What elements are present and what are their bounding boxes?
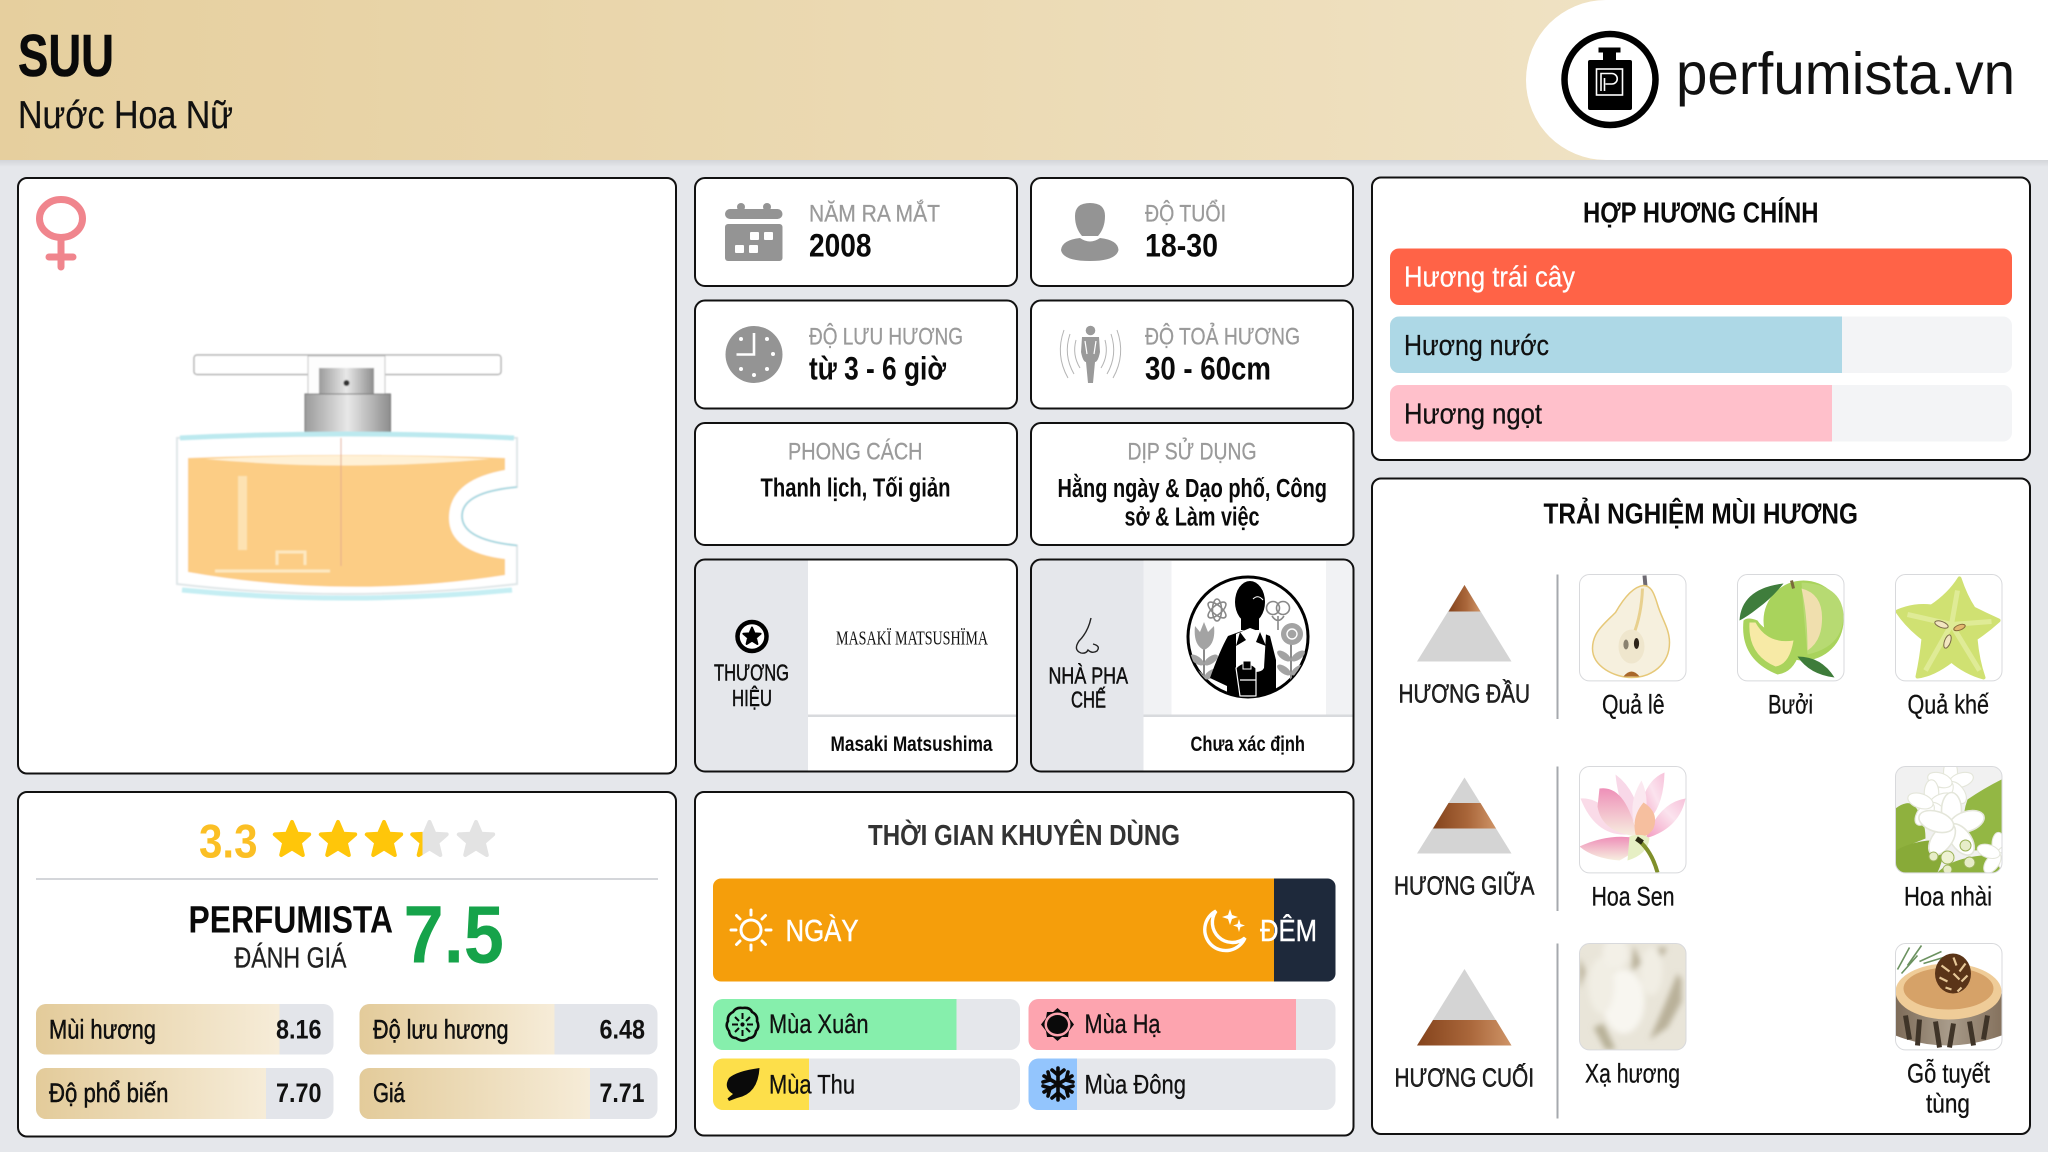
card: age range bbox=[1031, 178, 1353, 286]
score bar: longevity bbox=[360, 1004, 658, 1054]
card: style bbox=[695, 423, 1017, 545]
top notes row bbox=[1398, 574, 2002, 720]
night label: ĐÊM bbox=[1260, 913, 1317, 948]
note: cedar wood bbox=[1896, 944, 2002, 1118]
score bar: scent bbox=[36, 1004, 334, 1054]
note: pomelo bbox=[1738, 574, 1844, 720]
middle notes row bbox=[1394, 760, 2022, 912]
label: ĐỘ TOẢ HƯƠNG bbox=[1145, 322, 1300, 350]
note: lotus bbox=[1580, 766, 1686, 912]
icon: pyramid top bbox=[1417, 585, 1512, 662]
season: spring bbox=[713, 999, 1020, 1050]
label: ĐỘ TUỔI bbox=[1145, 200, 1226, 228]
icon: person radiating scent bbox=[1060, 326, 1121, 383]
note tier label: HƯƠNG GIỮA bbox=[1394, 872, 1534, 900]
label bbox=[1048, 662, 1129, 712]
panel: scent experience bbox=[1372, 478, 2030, 1134]
value: 30 - 60cm bbox=[1145, 350, 1271, 386]
season: summer bbox=[1028, 999, 1336, 1050]
card: release year bbox=[695, 178, 1017, 286]
value: 2008 bbox=[809, 228, 872, 264]
logo: perfumista.vn bbox=[1526, 0, 2048, 160]
note: musk bbox=[1580, 938, 1686, 1088]
label: DỊP SỬ DỤNG bbox=[1128, 436, 1256, 466]
day night bar bbox=[713, 878, 1336, 982]
season: winter: Mùa Đông bbox=[1084, 1070, 1186, 1100]
perfumer name: Chưa xác định bbox=[1190, 733, 1305, 756]
icon: snowflake bbox=[1043, 1068, 1073, 1100]
panel: rating bbox=[18, 792, 676, 1136]
score bar: popularity: 7.70 bbox=[276, 1078, 322, 1108]
card: brand bbox=[695, 560, 1017, 772]
accord bar: sweet: Hương ngọt bbox=[1404, 398, 1542, 430]
panel: perfume image bbox=[18, 178, 676, 774]
score bar: scent: Mùi hương bbox=[49, 1014, 156, 1044]
accord bar: fruity bbox=[1390, 248, 2012, 305]
note tier label: HƯƠNG ĐẦU bbox=[1398, 680, 1530, 708]
heading: TRẢI NGHIỆM MÙI HƯƠNG bbox=[1544, 496, 1858, 530]
header banner bbox=[0, 0, 2048, 167]
card: longevity bbox=[695, 300, 1017, 408]
season: summer: Mùa Hạ bbox=[1084, 1009, 1161, 1039]
label bbox=[714, 660, 789, 711]
value: 18-30 bbox=[1145, 228, 1218, 264]
perfume category: Nước Hoa Nữ bbox=[18, 94, 233, 137]
season: winter bbox=[1028, 1058, 1336, 1110]
heading: HỢP HƯƠNG CHÍNH bbox=[1583, 196, 1818, 230]
score bar: popularity bbox=[36, 1068, 334, 1119]
sub heading: ĐÁNH GIÁ bbox=[234, 942, 347, 974]
icon: female symbol bbox=[40, 200, 82, 267]
value: Thanh lịch, Tối giản bbox=[760, 474, 950, 502]
label: THƯƠNG bbox=[714, 660, 789, 686]
note: jasmine: Hoa nhài bbox=[1904, 882, 1992, 912]
score bar: longevity: 6.48 bbox=[600, 1014, 645, 1044]
icon: sun badge bbox=[1041, 1008, 1074, 1041]
score bar: price: Giá bbox=[373, 1078, 405, 1108]
label: PHONG CÁCH bbox=[788, 438, 922, 466]
heading: THỜI GIAN KHUYÊN DÙNG bbox=[868, 818, 1180, 852]
perfumer illustration bbox=[1188, 577, 1308, 697]
note: lotus: Hoa Sen bbox=[1592, 882, 1674, 912]
icon: pyramid base bbox=[1417, 969, 1512, 1046]
score bar: price: 7.71 bbox=[600, 1078, 644, 1108]
note: pear bbox=[1580, 574, 1686, 720]
icon: sun bbox=[731, 910, 771, 950]
label: NHÀ PHA bbox=[1048, 662, 1129, 688]
value: từ 3 - 6 giờ bbox=[809, 350, 946, 386]
card: occasion bbox=[1031, 423, 1354, 545]
note tier label: HƯƠNG CUỐI bbox=[1394, 1062, 1534, 1092]
label: NĂM RA MẮT bbox=[809, 200, 940, 228]
perfumista heading: PERFUMISTA bbox=[188, 900, 393, 942]
accord bar: fruity: Hương trái cây bbox=[1404, 262, 1576, 294]
perfume bottle illustration bbox=[177, 355, 517, 598]
season: spring: Mùa Xuân bbox=[769, 1009, 868, 1039]
brand logo wordmark: MASAKÏ MATSUSHÏMA bbox=[836, 628, 988, 650]
value bbox=[1058, 473, 1327, 532]
user rating score: 3.3 bbox=[199, 814, 258, 868]
icon: calendar bbox=[725, 203, 782, 261]
icon: clock bbox=[726, 326, 782, 383]
label: ĐỘ LƯU HƯƠNG bbox=[809, 322, 963, 350]
icon: moon bbox=[1205, 909, 1245, 951]
score bar: scent: 8.16 bbox=[276, 1014, 322, 1044]
score bar: popularity: Độ phổ biến bbox=[49, 1078, 168, 1108]
note: pear: Quả lê bbox=[1602, 690, 1664, 720]
note: star fruit: Quả khế bbox=[1908, 690, 1989, 720]
label: CHẾ bbox=[1071, 686, 1106, 712]
icon: leaf bbox=[727, 1068, 760, 1101]
icon: nose bbox=[1076, 618, 1098, 653]
accord bar: sweet bbox=[1390, 385, 2012, 442]
icon: star badge bbox=[738, 622, 766, 651]
season: autumn bbox=[713, 1058, 1020, 1110]
base notes row bbox=[1394, 938, 2002, 1118]
day label: NGÀY bbox=[786, 913, 858, 948]
note: pomelo: Bưởi bbox=[1768, 690, 1813, 720]
overall score: 7.5 bbox=[404, 890, 504, 980]
note: cedar wood: Gỗ tuyết bbox=[1907, 1058, 1990, 1088]
value: Hằng ngày & Dạo phố, Công bbox=[1058, 473, 1327, 503]
icon: person bbox=[1061, 203, 1118, 261]
brand name: Masaki Matsushima bbox=[830, 733, 993, 756]
note: cedar wood: tùng bbox=[1926, 1088, 1970, 1118]
card: perfumer bbox=[1031, 560, 1354, 772]
icon: flower bbox=[727, 1008, 758, 1040]
score bar: longevity: Độ lưu hương bbox=[373, 1014, 508, 1044]
perfume name: SUU bbox=[18, 23, 114, 89]
icon: pyramid middle bbox=[1417, 778, 1512, 854]
star rating bbox=[275, 822, 493, 855]
season: autumn: Mùa Thu bbox=[769, 1070, 855, 1100]
label: HIỆU bbox=[732, 685, 772, 711]
logo: perfumista.vn: perfumista.vn bbox=[1676, 41, 2015, 107]
score bar: price bbox=[360, 1068, 658, 1119]
panel: main accords bbox=[1372, 178, 2030, 460]
value: sở & Làm việc bbox=[1124, 504, 1260, 532]
accord bar: aquatic bbox=[1390, 316, 2012, 373]
panel: recommended time bbox=[695, 792, 1354, 1136]
note: star fruit bbox=[1896, 574, 2002, 720]
note: musk: Xạ hương bbox=[1585, 1058, 1680, 1088]
accord bar: aquatic: Hương nước bbox=[1404, 330, 1549, 362]
note: jasmine bbox=[1895, 766, 2002, 906]
card: projection bbox=[1031, 300, 1353, 408]
